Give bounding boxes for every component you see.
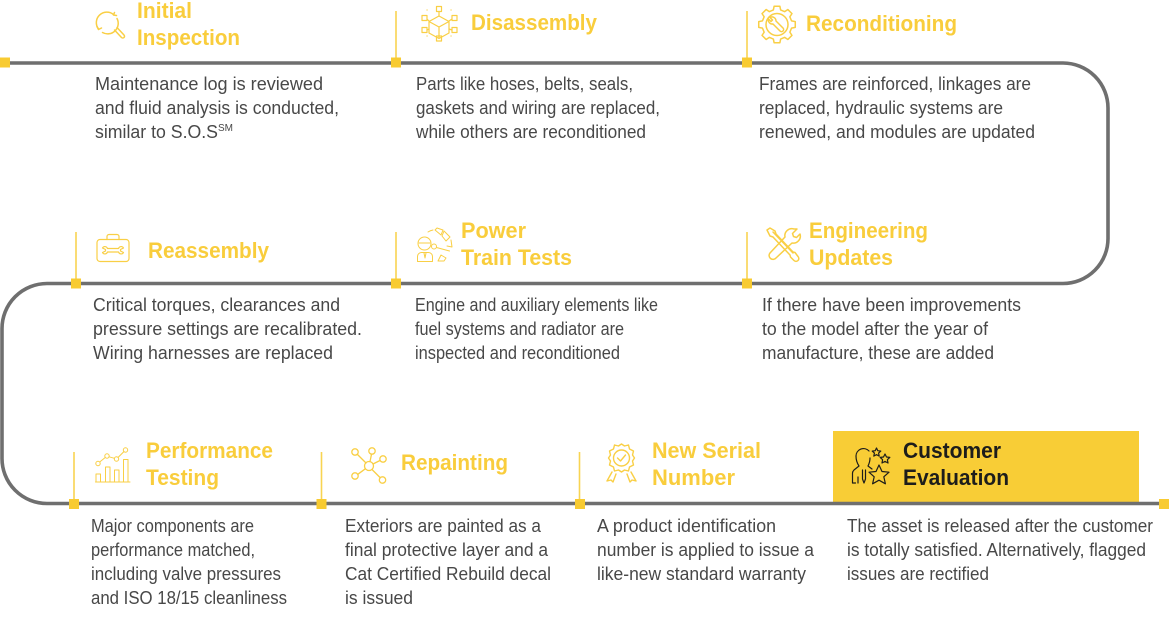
- heading: Evaluation: [903, 465, 1009, 490]
- icon: crossed wrench and screwdriver: [767, 228, 800, 261]
- text block: [345, 516, 551, 608]
- heading: [809, 218, 928, 270]
- panel: engineering updates: [762, 218, 1021, 363]
- heading: Inspection: [137, 25, 240, 50]
- heading: [137, 0, 240, 50]
- panel: reconditioning: [759, 6, 1035, 142]
- text block: final protective layer and a: [345, 540, 549, 560]
- heading: Reconditioning: [806, 11, 957, 36]
- text block: similar to S.O.S: [95, 122, 218, 142]
- text block: while others are reconditioned: [415, 122, 646, 142]
- panel: disassembly: [415, 6, 660, 142]
- heading: Customer: [903, 438, 1001, 463]
- heading: [461, 218, 572, 270]
- heading: Disassembly: [471, 10, 598, 35]
- icon: award rosette: [607, 444, 636, 482]
- text block: pressure settings are recalibrated.: [93, 319, 362, 339]
- text block: Engine and auxiliary elements like: [415, 295, 658, 315]
- heading: Reassembly: [148, 238, 270, 263]
- text block: number is applied to issue a: [597, 540, 815, 560]
- text block: [597, 516, 815, 584]
- text block: to the model after the year of: [762, 319, 989, 339]
- heading: Train Tests: [461, 245, 572, 270]
- callout: customer evaluation highlight box: [833, 431, 1139, 504]
- text block: [415, 295, 658, 363]
- panel: new serial number: [597, 438, 815, 584]
- heading: [903, 438, 1009, 490]
- text block: Critical torques, clearances and: [93, 295, 340, 315]
- text block: A product identification: [597, 516, 776, 536]
- heading: Updates: [809, 245, 893, 270]
- panel: performance testing: [91, 438, 287, 608]
- text block: [847, 516, 1153, 584]
- text block: Major components are: [91, 516, 254, 536]
- text block: The asset is released after the customer: [847, 516, 1153, 536]
- text block: renewed, and modules are updated: [759, 122, 1035, 142]
- text block: [759, 74, 1035, 142]
- text block: If there have been improvements: [762, 295, 1021, 315]
- icon: exploded cube: [422, 6, 457, 41]
- icon: magnifier: [96, 12, 125, 38]
- text block: Parts like hoses, belts, seals,: [416, 74, 633, 94]
- panel: power train tests: [415, 218, 658, 363]
- text block: inspected and reconditioned: [415, 343, 620, 363]
- heading: Performance: [146, 438, 273, 463]
- heading: [146, 438, 273, 490]
- text block: [93, 295, 362, 363]
- text block: Maintenance log is reviewed: [95, 74, 323, 94]
- icon: gear with wrench: [759, 6, 795, 43]
- text block: [762, 295, 1021, 363]
- serpentine process line: [2, 63, 1165, 504]
- text block: is totally satisfied. Alternatively, flagged: [847, 540, 1146, 560]
- text block: replaced, hydraulic systems are: [759, 98, 1003, 118]
- text block: Wiring harnesses are replaced: [93, 343, 333, 363]
- heading: Number: [652, 465, 735, 490]
- panel: customer evaluation: [847, 438, 1153, 584]
- icon: toolbox with wrench: [97, 234, 129, 262]
- text block: [91, 516, 287, 608]
- panel: repainting: [345, 448, 551, 608]
- text block: gaskets and wiring are replaced,: [416, 98, 660, 118]
- panel: initial inspection: [95, 0, 339, 142]
- text block: and ISO 18/15 cleanliness: [91, 588, 287, 608]
- text block: Exteriors are painted as a: [345, 516, 542, 536]
- text block: performance matched,: [91, 540, 255, 560]
- panel: reassembly: [93, 234, 362, 363]
- text block: like-new standard warranty: [597, 564, 806, 584]
- text block: [95, 74, 339, 142]
- text block: Cat Certified Rebuild decal: [345, 564, 551, 584]
- text block: including valve pressures: [91, 564, 281, 584]
- heading: [652, 438, 761, 490]
- text block: is issued: [345, 588, 413, 608]
- text block: SM: [218, 122, 233, 134]
- icon: technician and gauge: [418, 228, 452, 262]
- timeline connectors and markers: [0, 11, 1169, 509]
- text block: and fluid analysis is conducted,: [95, 98, 339, 118]
- icon: bar and line chart: [96, 448, 130, 482]
- text block: Frames are reinforced, linkages are: [759, 74, 1031, 94]
- heading: Power: [461, 218, 526, 243]
- heading: Engineering: [809, 218, 928, 243]
- heading: New Serial: [652, 438, 761, 463]
- text block: manufacture, these are added: [762, 343, 994, 363]
- icon: connected nodes: [352, 448, 386, 483]
- icon: person with stars: [852, 448, 890, 484]
- heading: Repainting: [401, 450, 508, 475]
- heading: Testing: [146, 465, 219, 490]
- text block: fuel systems and radiator are: [415, 319, 624, 339]
- text block: issues are rectified: [847, 564, 989, 584]
- text block: [415, 74, 660, 142]
